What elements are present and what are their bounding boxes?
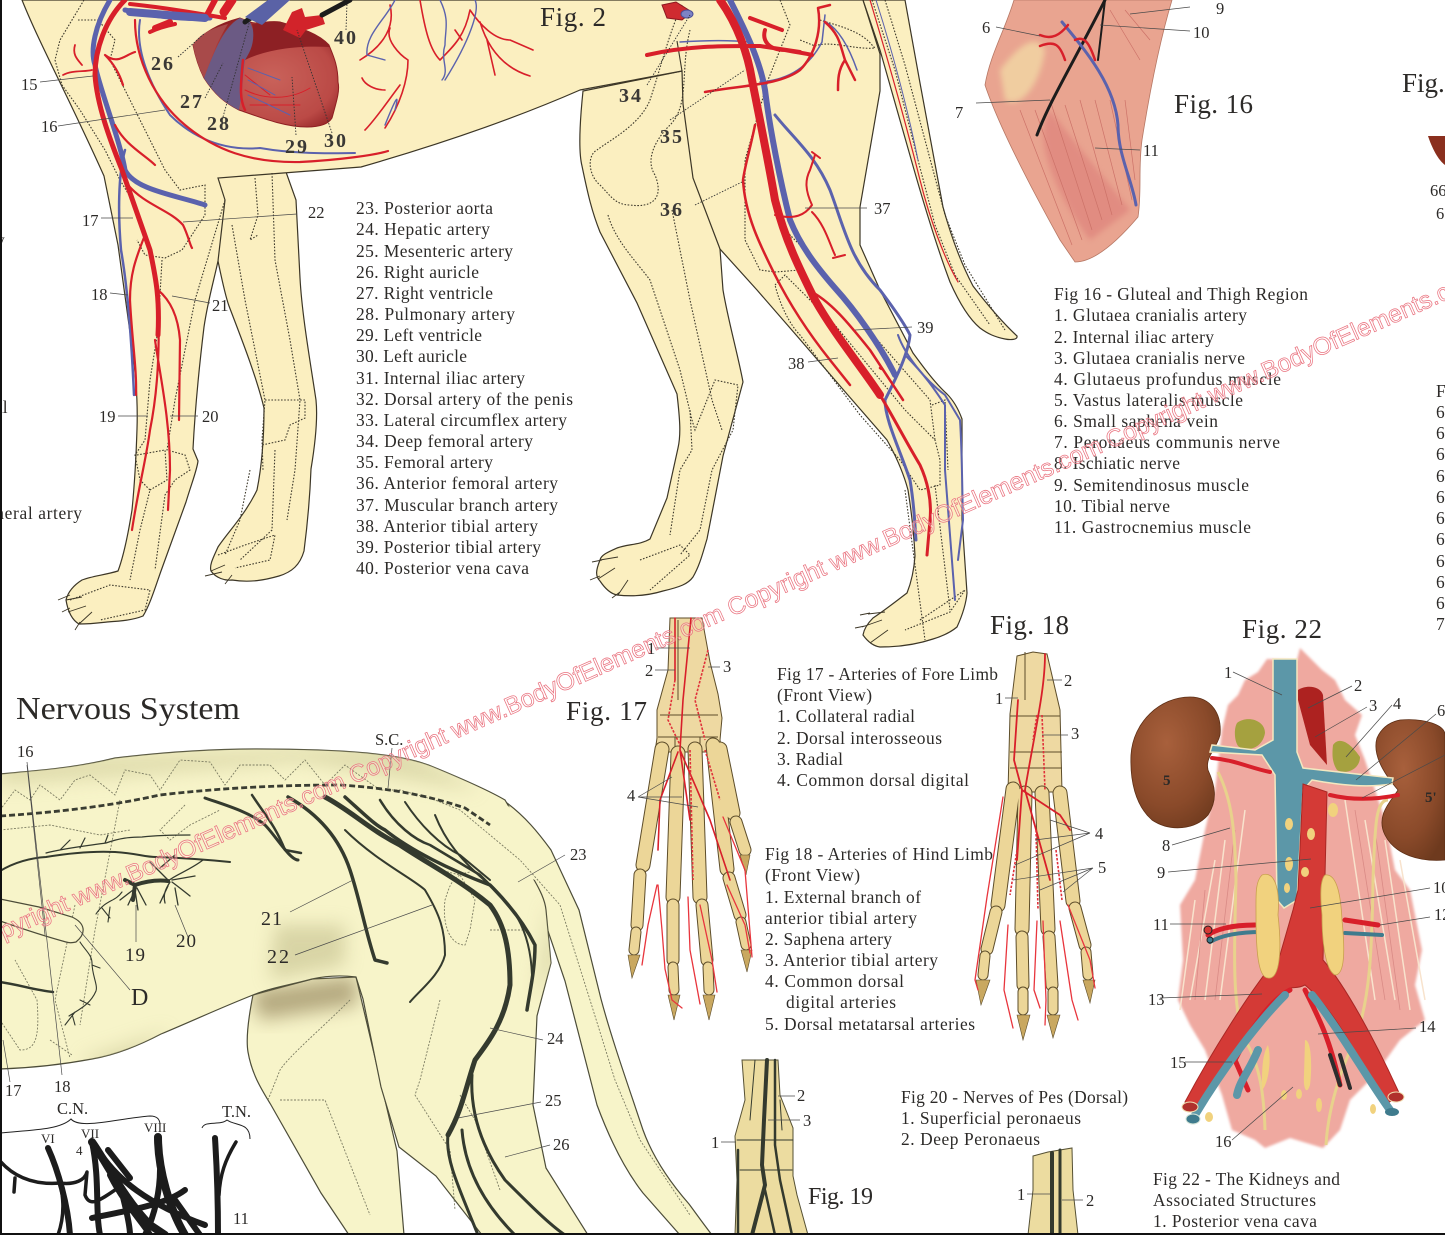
fig 18 legend: 3. Anterior tibial artery	[765, 950, 938, 970]
fig 2 legend: 39. Posterior tibial artery	[356, 537, 541, 557]
fig 22 labels: 2	[1354, 676, 1362, 695]
fig 2 legend: 34. Deep femoral artery	[356, 431, 533, 451]
fig 16 labels: 7	[955, 103, 963, 122]
fig 2 legend: 37. Muscular branch artery	[356, 495, 558, 515]
heart	[130, 0, 350, 127]
fig 2 legend: 33. Lateral circumflex artery	[356, 410, 567, 430]
renal vessels	[1212, 758, 1398, 799]
near fore leg bones	[55, 0, 225, 620]
fig 2 callout numbers: 39	[917, 318, 934, 337]
fig 18 legend: Fig 18 - Arteries of Hind Limb	[765, 844, 993, 864]
clipped right column: 6	[1436, 551, 1445, 571]
fig 2 callout numbers: 29	[285, 136, 309, 158]
fig 20: nerves of pes	[1017, 1148, 1094, 1235]
nervous system dog	[0, 730, 712, 1235]
iliac inner arteries	[1235, 990, 1340, 1090]
fig 16 legend: 3. Glutaea cranialis nerve	[1054, 348, 1245, 368]
muscle backdrop	[1178, 648, 1425, 1148]
tube ends	[1330, 1055, 1350, 1088]
fig 17 labels: 2	[645, 661, 653, 680]
fig 2 legend: 26. Right auricle	[356, 262, 479, 282]
fig 22 labels: 5'	[1425, 790, 1437, 806]
nervous labels: 18	[54, 1077, 70, 1096]
cranial labels	[0, 1099, 251, 1228]
fig 18 legend: digital arteries	[786, 992, 896, 1012]
shading	[0, 745, 560, 1075]
ganglia	[1235, 719, 1360, 772]
fig 20 legend: Fig 20 - Nerves of Pes (Dorsal)	[901, 1087, 1128, 1107]
nerves	[0, 795, 565, 1235]
ureters	[1218, 772, 1388, 1145]
tail	[863, 0, 1017, 340]
nervous labels: 16	[17, 742, 34, 761]
clipped right column	[1402, 68, 1445, 634]
fig 16 legend	[1054, 284, 1308, 537]
fig 20 legend: 2. Deep Peronaeus	[901, 1129, 1040, 1149]
fig 19 labels: 2	[797, 1086, 805, 1105]
fig 2 callout numbers: 17	[82, 211, 98, 230]
clipped right column: 6	[1436, 508, 1445, 528]
fig 16 legend: 11. Gastrocnemius muscle	[1054, 517, 1251, 537]
claws	[628, 855, 752, 1020]
fig 2 callout numbers: 34	[619, 85, 643, 107]
fig 2 callout numbers: 35	[660, 126, 684, 148]
fig 2 callout numbers: 27	[180, 91, 204, 113]
skeleton dotted lines	[0, 760, 690, 1215]
fig 17 legend: 2. Dorsal interosseous	[777, 728, 942, 748]
fig 17 labels: 1	[647, 639, 655, 658]
fig 22 labels: 13	[1148, 990, 1164, 1009]
fig 17 legend	[777, 664, 998, 790]
fig 22 labels: 16	[1215, 1132, 1232, 1151]
fig 22 title: Fig. 22	[1242, 614, 1322, 644]
fig 16 legend: 2. Internal iliac artery	[1054, 327, 1214, 347]
fig 22 labels: 14	[1419, 1017, 1436, 1036]
nervous labels	[3, 730, 586, 1157]
fig 2 callout numbers: 37	[874, 199, 890, 218]
fig 18 legend: 1. External branch of	[765, 887, 921, 907]
fig 2 legend: 31. Internal iliac artery	[356, 368, 525, 388]
fig 2 callout numbers	[21, 3, 934, 426]
fig 2 legend: 30. Left auricle	[356, 346, 467, 366]
belly organ vessels	[360, 0, 533, 130]
nervous labels: 23	[570, 845, 586, 864]
fig 2 legend	[356, 198, 573, 578]
fig 2 legend: 29. Left ventricle	[356, 325, 482, 345]
spinal cord	[0, 785, 490, 825]
fig 16 title: Fig. 16	[1174, 89, 1253, 119]
fig 16 legend: 1. Glutaea cranialis artery	[1054, 305, 1247, 325]
fig 2 legend: 36. Anterior femoral artery	[356, 473, 558, 493]
fig 18 legend: (Front View)	[765, 865, 860, 885]
fig 22 labels: 3	[1369, 696, 1377, 715]
fig 22 labels: 11	[1153, 915, 1169, 934]
fig 18 labels: 5	[1098, 858, 1106, 877]
fig 17 legend: 3. Radial	[777, 749, 843, 769]
cranial labels: VIII	[144, 1120, 166, 1135]
fig 18 labels	[995, 671, 1106, 892]
fig 18 labels: 2	[1064, 671, 1072, 690]
hind limb vessels	[647, 0, 963, 600]
adrenals and nodes	[1256, 874, 1344, 978]
fig 17 labels: 3	[723, 657, 731, 676]
fig 22: kidneys and associated structures	[1131, 648, 1445, 1151]
fig 19 labels	[711, 1086, 811, 1152]
fig 18 labels: 4	[1095, 824, 1103, 843]
nervous labels: S.C.	[375, 730, 403, 749]
fig 17 legend: 4. Common dorsal digital	[777, 770, 969, 790]
fig 22 legend: Associated Structures	[1153, 1190, 1316, 1210]
clipped right column: Fig.	[1402, 68, 1445, 98]
fig 22 labels: 4	[1393, 694, 1401, 713]
fig 16 labels	[955, 0, 1224, 160]
fig 16 legend: 8. Ischiatic nerve	[1054, 453, 1180, 473]
fig 2 legend: 25. Mesenteric artery	[356, 241, 513, 261]
iliac veins	[1195, 995, 1390, 1115]
fig 16 labels: 11	[1143, 141, 1159, 160]
nervous labels: 17	[5, 1081, 22, 1100]
fig 18 legend: 4. Common dorsal	[765, 971, 904, 991]
far fore leg bones	[218, 173, 305, 568]
fig 18: arteries of hind limb	[975, 652, 1106, 1040]
fig 16: gluteal and thigh muscle	[955, 0, 1224, 262]
fig 2 legend: 32. Dorsal artery of the penis	[356, 389, 573, 409]
fig 18 legend: 2. Saphena artery	[765, 929, 892, 949]
fig 2 legend: 35. Femoral artery	[356, 452, 493, 472]
fig 22 labels: 8	[1162, 836, 1170, 855]
cranial labels: VI	[41, 1131, 55, 1146]
nervous system heading: Nervous System	[16, 690, 240, 726]
forelimb and belly vessels	[63, 0, 388, 530]
clipped right column: 6	[1436, 572, 1445, 592]
fig 2 callout numbers: 40	[334, 27, 358, 49]
fig 19 labels: 3	[803, 1111, 811, 1130]
fig 2 legend: 28. Pulmonary artery	[356, 304, 515, 324]
fig 22 legend: Fig 22 - The Kidneys and	[1153, 1169, 1340, 1189]
figure 2: circulatory dog hindquarters and legs	[0, 0, 1017, 647]
fig 16 legend: Fig 16 - Gluteal and Thigh Region	[1054, 284, 1308, 304]
fig 2 legend: 40. Posterior vena cava	[356, 558, 529, 578]
nervous labels: 22	[267, 946, 291, 968]
fig 16 labels: 10	[1193, 23, 1210, 42]
fig 18 legend	[765, 844, 993, 1034]
fig 16 legend: 10. Tibial nerve	[1054, 496, 1170, 516]
paw toes and claws	[58, 557, 888, 643]
fig 22 labels: 9	[1157, 863, 1165, 882]
fig 17 legend: Fig 17 - Arteries of Fore Limb	[777, 664, 998, 684]
fig 2 callout numbers: 15	[21, 75, 38, 94]
fig 2 legend: 23. Posterior aorta	[356, 198, 493, 218]
nervous labels: 26	[553, 1135, 570, 1154]
tail vertebrae and vessels	[870, 0, 1005, 330]
fig 2 callout numbers: 22	[308, 203, 324, 222]
fig 17 legend: (Front View)	[777, 685, 872, 705]
fig 20 legend: 1. Superficial peronaeus	[901, 1108, 1081, 1128]
cranial labels: 11	[233, 1209, 249, 1228]
clipped right column: 6	[1436, 402, 1445, 422]
fig 2 callout numbers: 20	[202, 407, 218, 426]
far hind leg	[580, 71, 743, 596]
fig 19 title: Fig. 19	[808, 1184, 873, 1210]
far hind leg	[247, 977, 404, 1235]
fig 20 labels: 2	[1086, 1191, 1094, 1210]
fig 2 callout numbers: 18	[91, 285, 108, 304]
nervous labels: 19	[125, 945, 146, 966]
fig 2 title: Fig. 2	[540, 2, 606, 32]
fig 17 labels: 4	[627, 786, 635, 805]
fig 20 labels: 1	[1017, 1185, 1025, 1204]
cranial labels: 4	[76, 1143, 83, 1158]
clipped right column: 6	[1436, 529, 1445, 549]
fig 16 labels: 6	[982, 18, 990, 37]
fig 18 legend: anterior tibial artery	[765, 908, 917, 928]
cranial labels: T.N.	[222, 1102, 251, 1121]
clipped right column: 6	[1436, 593, 1445, 613]
fig 2 callout numbers: 21	[212, 296, 228, 315]
cranial nerve diagram	[0, 1099, 251, 1235]
fig 2 callout numbers: 38	[788, 354, 804, 373]
cranial nerves	[0, 1137, 236, 1235]
torso and near limbs	[22, 0, 967, 647]
fig 19: nerves of manus	[711, 1060, 811, 1235]
fig 2 callout numbers: 19	[99, 407, 116, 426]
fig 22 labels: 15	[1170, 1053, 1186, 1072]
fig 22 labels	[1148, 663, 1445, 1151]
fig 18 labels: 1	[995, 689, 1003, 708]
clipped right column: 6	[1436, 466, 1445, 486]
tail	[500, 798, 712, 1235]
far leg shading	[250, 975, 358, 1020]
fig 2 legend: 24. Hepatic artery	[356, 219, 490, 239]
cranial labels: VII	[81, 1126, 99, 1141]
nervous labels: D	[131, 985, 148, 1011]
fig 17 legend: 1. Collateral radial	[777, 706, 915, 726]
fig 17 labels	[627, 639, 731, 807]
fig 2 callout numbers: 16	[41, 117, 58, 136]
far fore leg	[211, 172, 317, 581]
fig 20 labels	[1017, 1185, 1094, 1210]
fig 22 labels: 1	[1224, 663, 1232, 682]
fig 16 legend: 5. Vastus lateralis muscle	[1054, 390, 1243, 410]
fig 2 callout numbers: 26	[151, 53, 175, 75]
fig 2 callout numbers: 30	[324, 130, 348, 152]
nervous labels: 25	[545, 1091, 562, 1110]
fig 2 legend: 38. Anterior tibial artery	[356, 516, 538, 536]
fig 22 labels: 5	[1163, 773, 1170, 789]
left kidney	[1131, 697, 1220, 828]
fig 17 title: Fig. 17	[566, 696, 647, 726]
clipped left legend	[0, 230, 82, 523]
clipped right column: 6	[1436, 487, 1445, 507]
fig 2 callout numbers: 28	[207, 113, 231, 135]
clipped right column: 6	[1436, 204, 1444, 223]
far hind leg bones	[590, 5, 738, 590]
fig 2 legend: 27. Right ventricle	[356, 283, 493, 303]
nervous labels: 21	[261, 908, 283, 930]
fig 16 legend: 4. Glutaeus profundus muscle	[1054, 369, 1281, 389]
ganglion branches	[125, 880, 168, 900]
fig 18 labels: 3	[1071, 724, 1079, 743]
vena cava	[1210, 659, 1393, 908]
fig 16 legend: 9. Semitendinosus muscle	[1054, 475, 1249, 495]
near hind leg bones	[745, 0, 965, 640]
fig 20 legend	[901, 1087, 1128, 1149]
nervous labels: 24	[547, 1029, 564, 1048]
nervous labels: 20	[176, 931, 197, 952]
fig 16 legend: 6. Small saphena vein	[1054, 411, 1218, 431]
fig 19 labels: 1	[711, 1133, 719, 1152]
fig 18 legend: 5. Dorsal metatarsal arteries	[765, 1014, 975, 1034]
fig 2 callout numbers: 36	[660, 199, 684, 221]
right kidney	[1376, 720, 1445, 860]
clipped right column: 7	[1436, 614, 1445, 634]
fig 17: arteries of fore limb	[627, 618, 752, 1020]
foreleg line	[0, 899, 83, 943]
patch hiding the torso edge against the tail root	[497, 799, 548, 880]
cranial labels: C.N.	[57, 1099, 88, 1118]
fig 16 legend: 7. Peronaeus communis nerve	[1054, 432, 1280, 452]
aorta	[1185, 784, 1400, 1110]
clipped right column: 6	[1436, 444, 1445, 464]
nerve and vessels	[1037, 0, 1136, 205]
fig 22 legend: 1. Posterior vena cava	[1153, 1211, 1317, 1231]
clipped right column: 6	[1436, 423, 1445, 443]
claws	[976, 980, 1095, 1040]
torso and near hind leg	[0, 749, 588, 1235]
fig 22 legend	[1153, 1169, 1340, 1231]
fig 18 title: Fig. 18	[990, 610, 1069, 640]
